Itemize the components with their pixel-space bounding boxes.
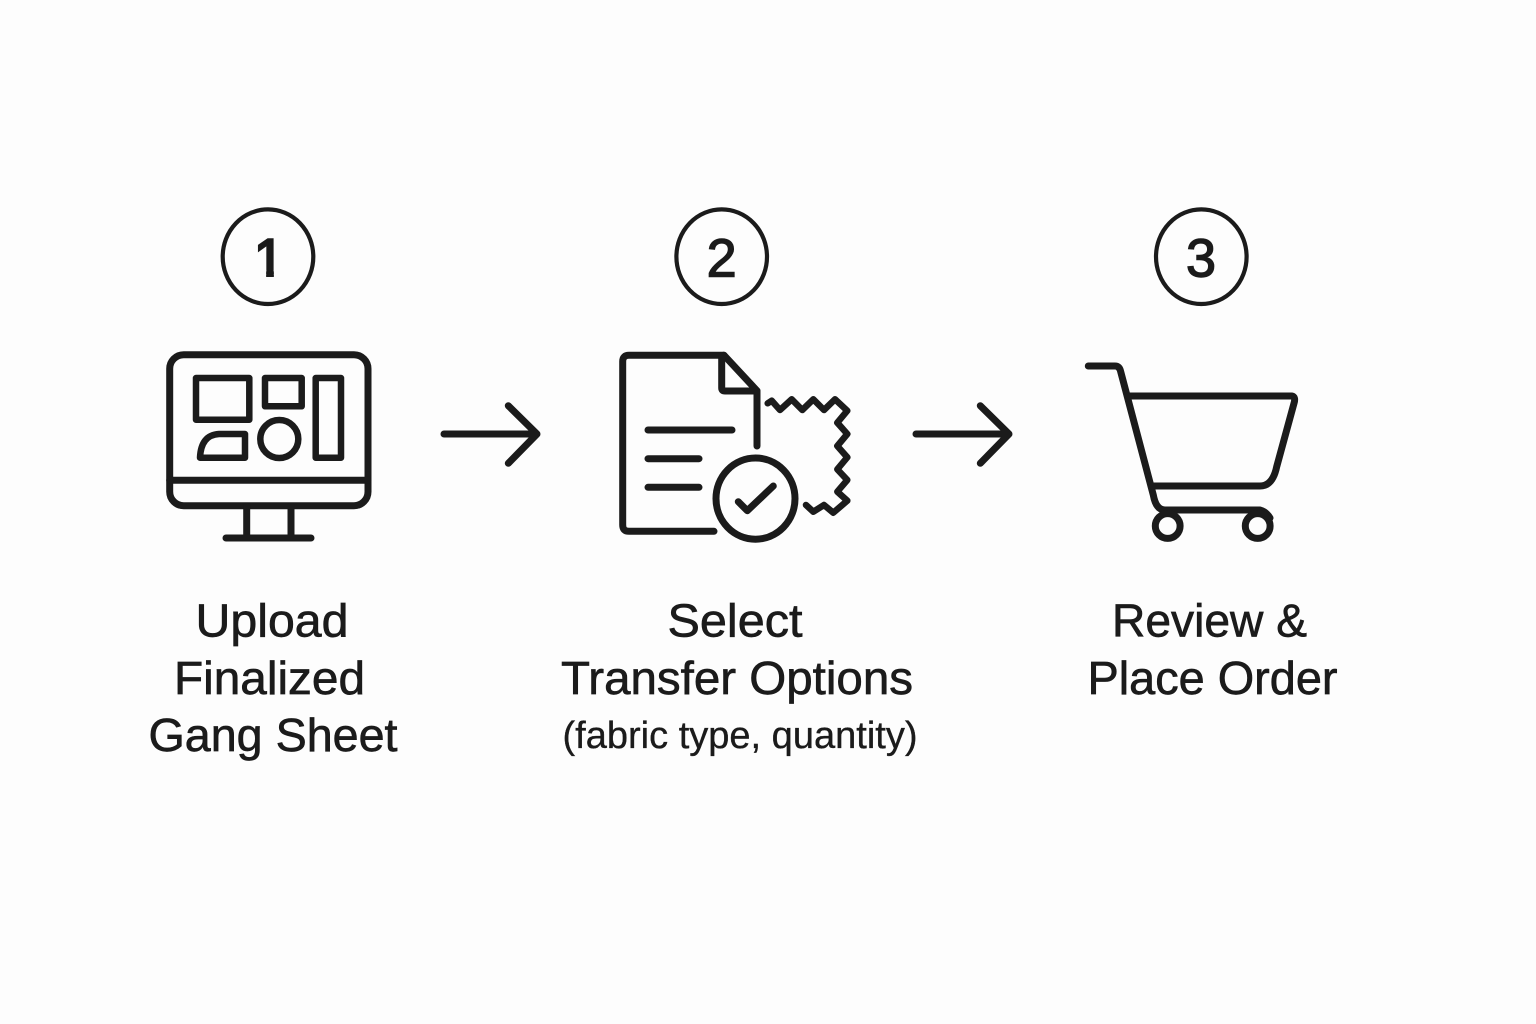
- icon: document with checkmark and fabric swatch: [623, 355, 847, 539]
- label: step 2: [561, 595, 918, 757]
- icon: monitor with gang sheet layout: [170, 355, 368, 538]
- label: step 2: Select: [668, 595, 803, 647]
- step 3 number badge: 3: [1186, 228, 1216, 288]
- icon: shopping cart: [1088, 366, 1295, 538]
- arrow: step 1 to step 2: [444, 406, 537, 463]
- label: step 2: (fabric type, quantity): [562, 715, 918, 757]
- label: step 1: Upload: [196, 595, 348, 647]
- step 1 number badge: 1: [254, 228, 284, 288]
- label: step 2: Transfer Options: [561, 652, 913, 704]
- label: step 3: Review &: [1112, 595, 1307, 647]
- arrow: step 2 to step 3: [916, 406, 1009, 463]
- step 1 number badge: [223, 209, 313, 304]
- label: step 3: Place Order: [1088, 652, 1338, 704]
- step 3 number badge: [1156, 209, 1247, 304]
- step 2 number badge: 2: [707, 228, 737, 288]
- label: step 1: Gang Sheet: [148, 709, 398, 761]
- label: step 1: Finalized: [174, 652, 365, 704]
- step 2 number badge: [676, 209, 767, 304]
- label: step 1: [148, 595, 398, 761]
- label: step 3: [1088, 595, 1338, 704]
